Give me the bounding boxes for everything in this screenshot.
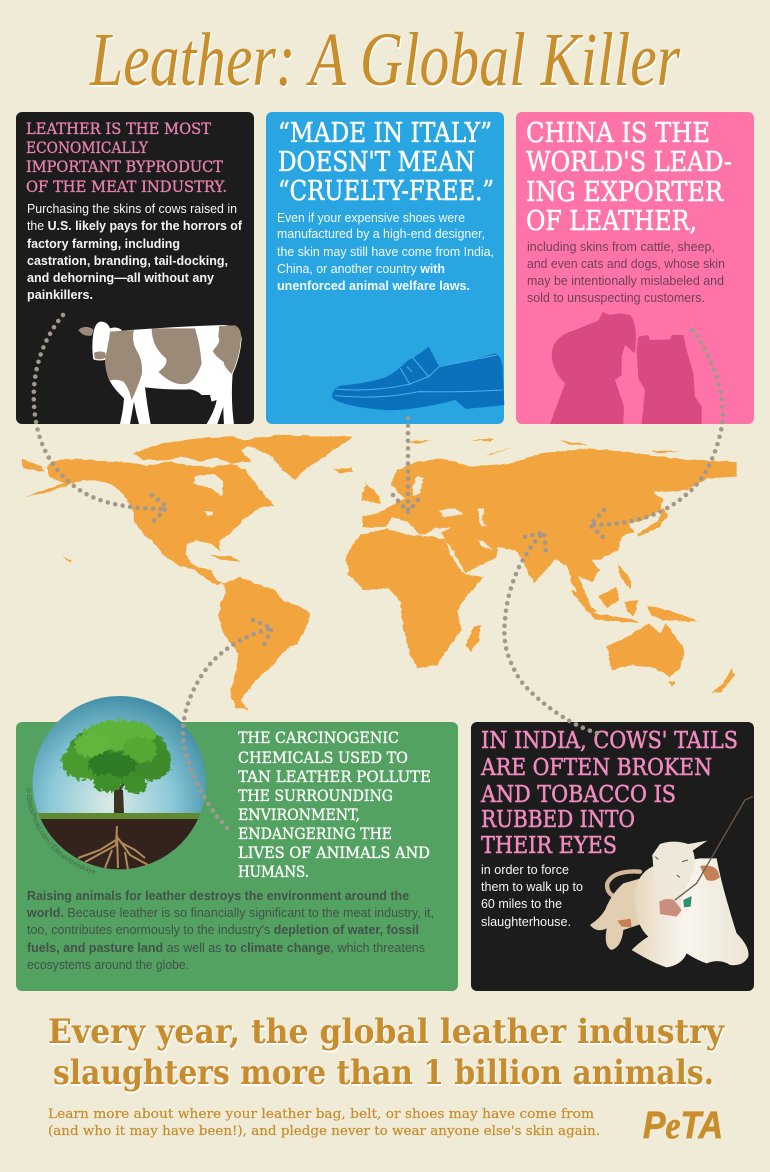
icon: white cow: [590, 797, 753, 967]
heading: [480, 728, 738, 859]
body text: may be intentionally mislabeled and: [527, 273, 724, 288]
call to action: [48, 1107, 600, 1139]
body text: fuels, and pasture land as well as to climate change, which threatens: [27, 940, 425, 955]
tree photo: [26, 696, 206, 874]
heading: THEIR EYES: [481, 833, 617, 859]
Persian Gulf: [477, 541, 493, 549]
heading: LEATHER IS THE MOST: [26, 119, 211, 138]
heading: ENVIRONMENT,: [238, 806, 360, 824]
body text: China, or another country with: [277, 261, 445, 276]
heading: ARE OFTEN BROKEN: [480, 755, 712, 781]
body text: [27, 201, 243, 302]
body text: ecosystems around the globe.: [27, 957, 189, 972]
heading: CHEMICALS USED TO: [238, 749, 408, 767]
heading: CHINA IS THE: [526, 118, 710, 149]
UK and Ireland: [361, 483, 381, 503]
Philippines: [618, 563, 631, 590]
Borneo: [598, 587, 620, 608]
panel: made in italy: [266, 112, 504, 424]
tree photo: © iStockPhoto.com / ElenaVizerskaya: [26, 788, 96, 874]
body text: manufactured by a high-end designer,: [277, 226, 485, 241]
heading: [278, 118, 494, 207]
Black Sea: [438, 508, 464, 517]
New Zealand: [711, 668, 735, 693]
Africa: [346, 528, 484, 668]
Japan: [636, 507, 668, 537]
panel: india: [471, 722, 754, 991]
body text: the U.S. likely pays for the horrors of: [27, 218, 243, 233]
callout: slaughter statistic: Every year, the global leather industry: [48, 1012, 725, 1052]
heading: THE CARCINOGENIC: [238, 729, 399, 747]
Greenland: [236, 435, 354, 480]
body text: and even cats and dogs, whose skin: [527, 256, 725, 271]
Eurasia: [362, 448, 737, 608]
arrow: environment panel to South America: [183, 620, 272, 828]
heading: THE SURROUNDING: [238, 787, 393, 805]
body text: [26, 888, 434, 972]
world map: [22, 435, 737, 710]
Sumatra and Java: [570, 590, 638, 623]
head: [652, 841, 707, 917]
arrow: india panel to India: [504, 532, 597, 733]
panel: environment: [16, 696, 458, 991]
heading: IN INDIA, COWS' TAILS: [481, 728, 738, 754]
arrow: china panel to China: [590, 330, 723, 538]
Red Sea: [446, 541, 465, 573]
body text: factory farming, including: [27, 236, 180, 251]
North America: [25, 458, 275, 586]
photo credit: [26, 788, 120, 877]
heading: [26, 119, 227, 196]
body text: [481, 862, 583, 929]
body text: slaughterhouse.: [481, 914, 571, 929]
body text: Even if your expensive shoes were: [277, 210, 465, 225]
heading: DOESN'T MEAN: [278, 147, 475, 178]
heading: OF LEATHER,: [526, 206, 697, 237]
call to action: (and who it may have been!), and pledge never to wear anyone else's skin again.: [48, 1124, 600, 1139]
body text: unenforced animal welfare laws.: [277, 278, 470, 293]
body text: world. Because leather is so financially significant to the meat industry, it,: [26, 905, 434, 920]
inland waters: [194, 473, 493, 573]
heading: ECONOMICALLY: [26, 138, 148, 157]
body text: too, contributes enormously to the industry's depletion of water, fossil: [27, 922, 419, 937]
callout: slaughter statistic: [48, 1012, 725, 1093]
heading: [526, 118, 732, 237]
heading: [238, 729, 431, 881]
Iceland: [333, 468, 354, 473]
South America: [219, 577, 310, 710]
Caribbean and Pacific islands: [61, 555, 241, 563]
Madagascar: [466, 625, 480, 652]
heading: AND TOBACCO IS: [480, 782, 676, 808]
heading: LIVES OF ANIMALS AND: [238, 844, 430, 862]
body text: [277, 210, 494, 293]
heading: RUBBED INTO: [481, 807, 635, 833]
rear leg: [590, 877, 647, 950]
body text: including skins from cattle, sheep,: [527, 239, 715, 254]
arrow: shoe to Italy: [393, 418, 422, 512]
cow body: [632, 858, 748, 967]
Baltic Sea: [412, 477, 423, 496]
body text: and dehorning—all without any: [27, 270, 215, 285]
heading: WORLD'S LEAD-: [526, 147, 732, 178]
call to action: Learn more about where your leather bag, belt, or shoes may have come from: [48, 1107, 594, 1122]
Sulawesi: [625, 600, 638, 617]
Hudson Bay: [194, 473, 223, 496]
Arctic islands: [133, 437, 255, 463]
Australia: [607, 623, 685, 677]
heading: ENDANGERING THE: [238, 825, 392, 843]
Arctic Russia islands: [408, 438, 680, 457]
Caspian Sea: [478, 508, 486, 527]
body text: them to walk up to: [481, 879, 583, 894]
icon: cow: [78, 322, 242, 424]
body text: 60 miles to the: [481, 896, 562, 911]
heading: “MADE IN ITALY”: [278, 118, 492, 149]
body text: [527, 239, 725, 305]
body text: painkillers.: [27, 287, 93, 302]
heading: ING EXPORTER: [526, 177, 724, 208]
heading: HUMANS.: [238, 863, 309, 881]
New Guinea: [648, 605, 700, 622]
arrow: cow to North America: [34, 315, 167, 523]
heading: “CRUELTY-FREE.”: [278, 176, 494, 207]
Great Lakes: [204, 512, 214, 516]
icon: shoe: [332, 347, 504, 410]
body text: Raising animals for leather destroys the environment around the: [27, 888, 409, 903]
body text: Purchasing the skins of cows raised in: [27, 201, 237, 216]
Alaska islands: [22, 458, 44, 472]
body text: the skin may still have come from India,: [277, 244, 494, 259]
heading: TAN LEATHER POLLUTE: [238, 768, 431, 786]
body text: castration, branding, tail-docking,: [27, 253, 228, 268]
logo: PETA: PeTA: [643, 1105, 723, 1147]
body text: in order to force: [481, 862, 569, 877]
icon: dog and cat silhouettes: [550, 312, 702, 424]
heading: IMPORTANT BYPRODUCT: [26, 157, 223, 176]
panel: leather byproduct: [16, 112, 254, 424]
heading: OF THE MEAT INDUSTRY.: [26, 177, 227, 196]
panel: china: [516, 112, 754, 424]
body text: sold to unsuspecting customers.: [527, 290, 705, 305]
Tasmania: [668, 682, 675, 687]
